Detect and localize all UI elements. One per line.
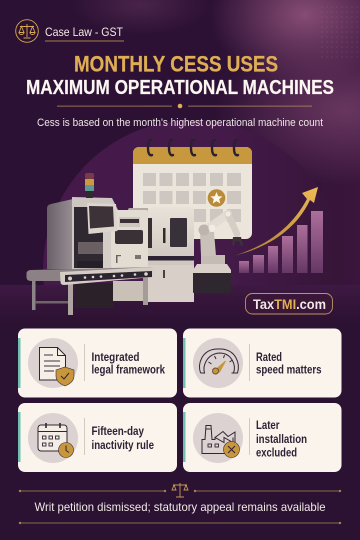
card text: installation <box>256 434 307 446</box>
panel: rated speed matters <box>183 328 342 398</box>
icon: small scales <box>172 483 188 497</box>
hero illustration <box>26 140 332 315</box>
icon: scales of justice <box>16 20 38 42</box>
panel: integrated legal framework <box>18 328 177 398</box>
title: MONTHLY CESS USES <box>74 52 278 76</box>
growth arrow <box>235 187 318 256</box>
calendar rings <box>148 140 238 155</box>
card text: legal framework <box>92 364 165 376</box>
robot arm <box>193 211 243 293</box>
footer <box>19 483 341 524</box>
badge label: Case Law - GST <box>45 25 124 39</box>
card text: Rated <box>256 352 282 364</box>
stack light <box>85 173 94 198</box>
icon: document with shield <box>40 348 74 386</box>
header badge: Case Law - GST <box>16 20 124 42</box>
card text: Integrated <box>92 352 140 364</box>
conveyor <box>26 267 154 315</box>
footer statement: Writ petition dismissed; statutory appeal remains available <box>34 500 326 514</box>
icon: calendar with clock <box>38 423 74 458</box>
machine label marks <box>116 255 118 263</box>
title <box>26 52 334 99</box>
icon: factory with cross <box>202 426 240 458</box>
card text: Later <box>256 420 280 432</box>
TaxTMI badge <box>246 294 332 314</box>
panel: fifteen-day inactivity rule <box>18 403 177 472</box>
machine: rear unit <box>128 207 194 302</box>
card text: Fifteen-day <box>92 426 145 438</box>
TaxTMI badge: TaxTMI.com <box>253 297 326 312</box>
panel: later installation excluded <box>183 403 342 472</box>
title divider <box>57 104 312 108</box>
footer rules <box>19 490 341 524</box>
bar chart <box>239 211 323 273</box>
machine: main unit <box>47 173 148 269</box>
card text: speed matters <box>256 364 322 376</box>
card text: inactivity rule <box>92 440 154 452</box>
icon: highlighted star date <box>208 189 225 207</box>
icon: speedometer <box>200 349 238 374</box>
calendar <box>133 140 252 239</box>
subtitle: Cess is based on the month's highest operational machine count <box>37 117 323 129</box>
card text: excluded <box>256 448 297 460</box>
